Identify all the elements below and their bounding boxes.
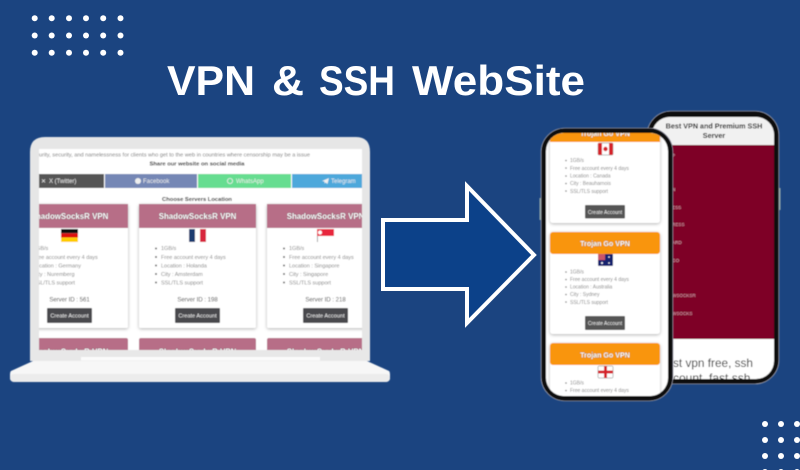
server card: Germany: Free account every 4 days — [33, 255, 98, 261]
server card: France: Create Account — [178, 314, 217, 320]
laptop base — [10, 361, 390, 382]
phone: front — [540, 120, 673, 413]
server card: Singapore: 1GB/s — [289, 246, 305, 252]
server card: Germany: Create Account — [50, 314, 89, 320]
social share bar: X (Twitter) — [49, 179, 76, 185]
back phone body text: st vpn free, ssh — [673, 356, 753, 370]
server card: Australia: Trojan Go VPN — [580, 240, 630, 248]
server card: England: Trojan Go VPN — [580, 352, 630, 360]
server card: France: City : Amsterdam — [161, 272, 203, 278]
server card: Canada: Create Account — [588, 210, 623, 216]
server card: France: Location : Holanda — [161, 264, 208, 270]
second row card headers: ShadowSocksR VPN — [287, 348, 365, 356]
share heading: Share our website on social media — [149, 162, 245, 168]
back phone screen: N — [672, 187, 675, 192]
server card: Australia: Free account every 4 days — [570, 277, 629, 283]
back phone screen: WSOCKS — [672, 311, 692, 316]
server card: Canada: Free account every 4 days — [570, 166, 629, 172]
back phone screen: RESS — [672, 222, 685, 227]
back phone screen: Server — [703, 131, 725, 140]
server card: Canada: Trojan Go VPN — [580, 130, 630, 138]
laptop screen — [38, 148, 362, 350]
back phone screen: count, fast ssh — [673, 371, 750, 385]
social share bar: ✕ — [41, 179, 46, 185]
servers heading: Choose Servers Location — [162, 197, 232, 203]
server card: Canada: 1GB/s — [570, 158, 584, 164]
second row card headers — [38, 338, 363, 351]
social share bar: Telegram — [331, 179, 356, 185]
arrow — [383, 186, 534, 323]
title — [167, 57, 585, 104]
back phone screen: ESS — [672, 205, 681, 210]
laptop bezel bottom — [30, 350, 370, 361]
back phone screen: P — [672, 153, 675, 158]
server card: France: ShadowSocksR VPN — [159, 212, 237, 221]
server card: Singapore: Server ID : 218 — [305, 298, 346, 304]
server card: Germany: Location : Germany — [33, 264, 81, 270]
intro text: urity, security, and namelessness for clients who get to the web in countries where censorship may be a issue — [39, 152, 310, 158]
social share bar: Facebook — [143, 179, 170, 185]
server card: Singapore — [265, 203, 363, 331]
laptop hinge notch — [81, 357, 320, 360]
server card: Canada: Location : Canada — [570, 174, 611, 180]
title: WebSite — [412, 57, 585, 104]
server card: Australia: Location : Australia — [570, 284, 612, 290]
server card: Germany: 1GB/s — [33, 246, 49, 252]
server card: Germany: Server ID : 561 — [49, 298, 90, 304]
title: VPN — [167, 57, 255, 104]
server card: Singapore: Free account every 4 days — [289, 255, 354, 261]
server card: France: Server ID : 198 — [177, 298, 218, 304]
server card: Australia — [550, 232, 660, 334]
server card: Singapore: Location : Singapore — [289, 264, 339, 270]
social share bar — [39, 174, 362, 188]
server card: Singapore: SSL/TLS support — [289, 280, 331, 286]
dot pattern: bottom right — [762, 421, 800, 470]
back phone screen: WSOCKSR — [672, 293, 696, 298]
laptop — [10, 137, 390, 382]
back phone heading: Best VPN and Premium SSH — [666, 122, 762, 130]
server card: France: SSL/TLS support — [161, 280, 203, 286]
back phone menu panel — [672, 144, 775, 340]
title: & — [272, 57, 304, 104]
server card: Germany: City : Nuremberg — [33, 272, 75, 278]
second row card headers: ShadowSocksR VPN — [31, 348, 109, 356]
server card: Canada: SSL/TLS support — [570, 189, 609, 195]
server card: Germany: ShadowSocksR VPN — [31, 212, 109, 221]
server card: Canada — [550, 120, 660, 223]
dot pattern: top left — [32, 15, 124, 56]
laptop lid — [30, 137, 370, 362]
front phone screen — [546, 120, 668, 413]
second row card headers: ShadowSocksR VPN — [159, 348, 237, 356]
server card: France: Free account every 4 days — [161, 255, 226, 261]
server card: France: 1GB/s — [161, 246, 177, 252]
server card: England: 1GB/s — [570, 380, 584, 386]
server card: Australia: Create Account — [588, 321, 623, 327]
server card: England: Free account every 4 days — [570, 388, 629, 394]
back phone screen — [652, 117, 774, 385]
phone: back — [647, 111, 780, 385]
back phone screen: GO — [672, 258, 680, 263]
server card: Canada: City : Beauharnois — [570, 181, 611, 187]
server card: England — [548, 342, 662, 397]
server card: Germany: SSL/TLS support — [33, 280, 75, 286]
server card: France — [139, 204, 256, 328]
title: SSH — [319, 57, 395, 104]
server card: Australia: City : Sydney — [570, 292, 600, 298]
social share bar: WhatsApp — [236, 179, 264, 185]
server card: Singapore: ShadowSocksR VPN — [287, 212, 365, 221]
server card: Singapore: City : Singapore — [289, 272, 328, 278]
server card: Germany — [38, 203, 130, 331]
server card: Australia: SSL/TLS support — [570, 300, 609, 306]
back phone screen: ARD — [672, 240, 682, 245]
server card: Australia: 1GB/s — [570, 270, 584, 276]
server card: Singapore: Create Account — [306, 314, 345, 320]
